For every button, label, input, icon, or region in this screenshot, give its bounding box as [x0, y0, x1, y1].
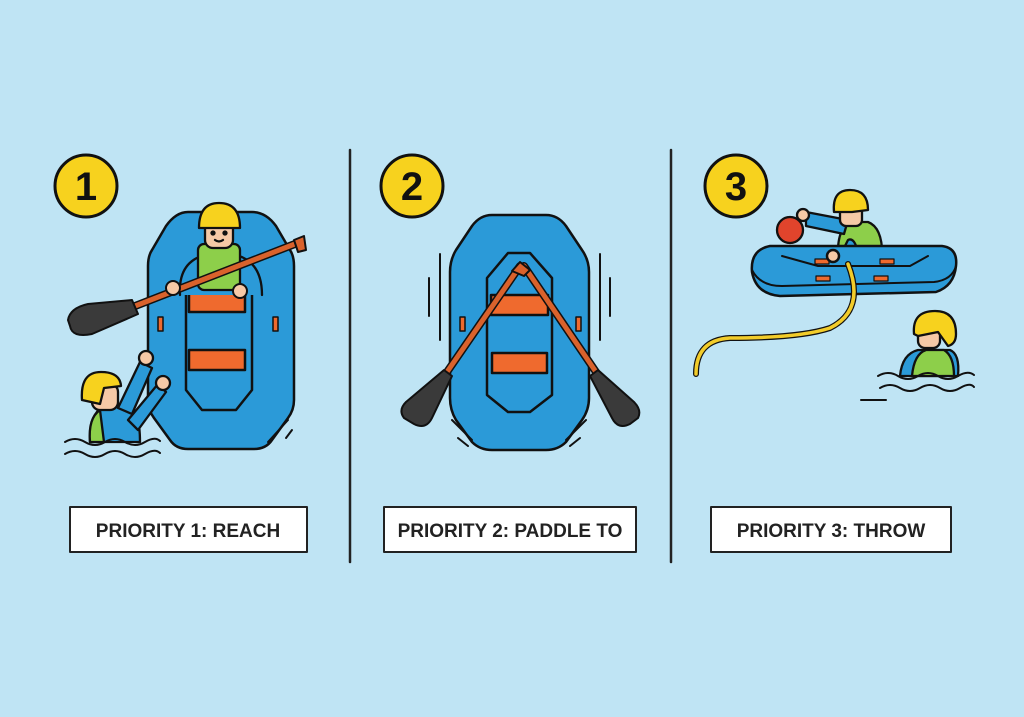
raft side view [752, 246, 956, 296]
badge 2: 2 [401, 165, 423, 209]
badge 2 [381, 155, 443, 217]
label 1: PRIORITY 1: REACH [96, 521, 280, 542]
paddle 1 [68, 236, 306, 335]
swimmer 3 [861, 311, 974, 400]
boat top view 2 [450, 215, 589, 450]
badge 1: 1 [75, 165, 97, 209]
label 3: PRIORITY 3: THROW [737, 521, 925, 542]
label 3 [711, 507, 951, 552]
panel 3: throw [696, 155, 974, 552]
badge 3 [705, 155, 767, 217]
panel 2: paddle to [381, 155, 639, 552]
label 1 [70, 507, 307, 552]
throw rope [696, 264, 854, 374]
label 2 [384, 507, 636, 552]
boat top view 1 [148, 212, 294, 449]
badge 1 [55, 155, 117, 217]
thrower person [777, 190, 882, 264]
panel 1: reach [55, 155, 307, 552]
swimmer reaching [65, 351, 292, 457]
crossed oars [401, 254, 639, 446]
label 2: PRIORITY 2: PADDLE TO [398, 521, 622, 542]
badge 3: 3 [725, 165, 747, 209]
person in boat [180, 203, 262, 295]
